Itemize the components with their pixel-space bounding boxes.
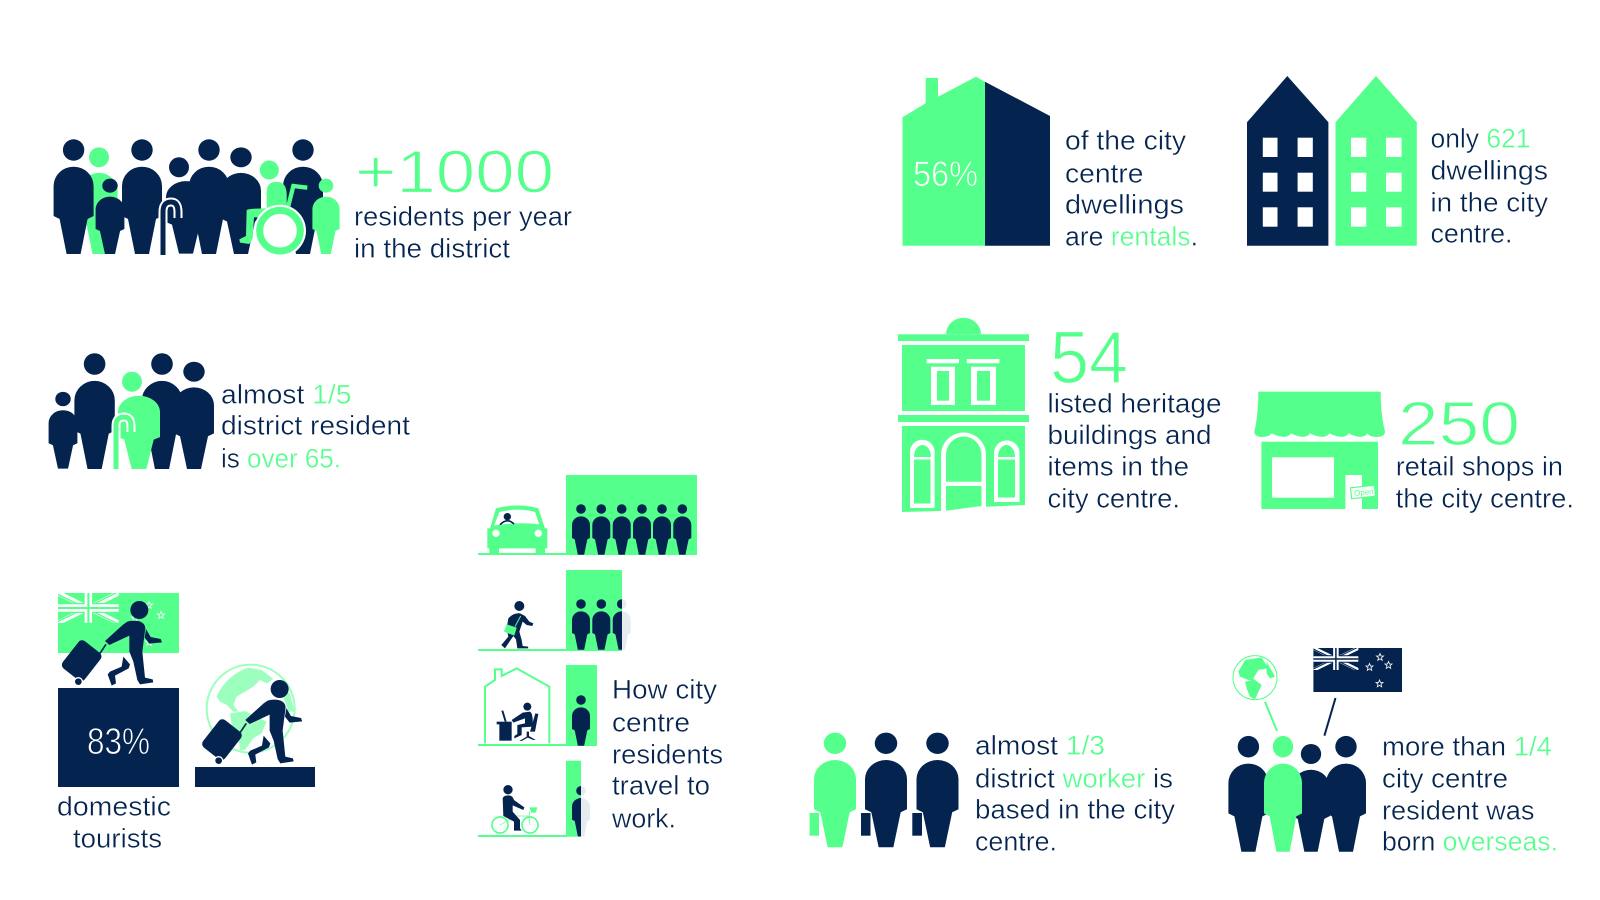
fifth resident (189, 139, 229, 254)
adult far right (174, 362, 214, 469)
people group (1228, 736, 1366, 852)
awning (1254, 392, 1385, 437)
six commuters (572, 504, 691, 555)
dwellings text: only 621 (1430, 124, 1530, 154)
overseas born residents icon (1228, 647, 1402, 852)
walking row (478, 570, 631, 651)
rentals text (1065, 126, 1198, 252)
heritage building icon (898, 318, 1029, 512)
commute caption: centre (612, 708, 690, 738)
walking cane (163, 202, 178, 255)
overseas text: born overseas. (1382, 827, 1558, 857)
overseas text: more than 1/4 (1382, 732, 1552, 762)
rentals text: of the city (1065, 126, 1187, 156)
wheelchair user (239, 160, 307, 257)
+1000 figure: +1000 (355, 139, 554, 206)
commute caption (611, 675, 723, 834)
home office icon (485, 668, 549, 743)
two townhouses icon (1247, 76, 1417, 246)
83% figure: 83% (87, 721, 150, 762)
third resident (122, 139, 162, 254)
pedestrian icon (501, 601, 533, 648)
overseas text: city centre (1382, 763, 1508, 793)
navy bar (58, 688, 179, 787)
over 65 text (221, 379, 411, 473)
adult left (74, 353, 115, 469)
250 figure: 250 (1398, 390, 1520, 459)
over 65 text: district resident (221, 411, 411, 441)
green resident (80, 147, 118, 254)
residents per year text: residents per year (354, 202, 572, 232)
54 figure: 54 (1050, 316, 1128, 399)
dwellings text: centre. (1430, 219, 1512, 249)
domestic tourists label: domestic (57, 792, 171, 822)
group of residents icon (54, 139, 340, 257)
retail text (1396, 452, 1574, 513)
open sign: Open (1354, 487, 1374, 498)
cyclist icon (492, 785, 538, 833)
navy speech line (1324, 698, 1336, 736)
car row (478, 475, 697, 555)
one commuter (572, 695, 590, 746)
globe icon (207, 665, 295, 753)
child (49, 392, 77, 469)
residents per year text (354, 202, 572, 263)
green child (312, 179, 340, 254)
car icon (487, 505, 547, 553)
half commuter (572, 786, 581, 836)
residents per year text: in the district (354, 233, 511, 263)
retail text: the city centre. (1396, 483, 1574, 513)
navy worker (861, 733, 907, 847)
dwellings text: dwellings (1430, 156, 1548, 186)
first resident (54, 139, 94, 254)
heritage text: buildings and (1048, 420, 1212, 450)
commute panel (478, 475, 723, 837)
small globe (1233, 656, 1277, 700)
overseas text (1382, 732, 1558, 857)
dwellings text (1430, 124, 1549, 249)
working from home row (478, 665, 597, 746)
commute caption: residents (612, 740, 723, 770)
green townhouse (1336, 76, 1417, 246)
sixth resident (221, 147, 261, 254)
navy bar (195, 767, 315, 787)
green worker (810, 733, 856, 847)
rentals text: centre (1065, 158, 1144, 188)
heritage text: listed heritage (1048, 388, 1222, 418)
workers text: centre. (975, 827, 1057, 857)
workers text: based in the city (975, 795, 1176, 825)
workers text: district worker is (975, 763, 1173, 793)
navy worker (912, 733, 958, 847)
domestic tourists panel (57, 592, 179, 854)
workers text (975, 731, 1176, 857)
faded commuter (572, 786, 590, 836)
green NZ flag (58, 592, 179, 653)
three commuters (572, 599, 622, 650)
rentals text: dwellings (1065, 190, 1184, 220)
international tourists panel (195, 665, 315, 787)
green speech line (1265, 702, 1277, 731)
dwellings text: in the city (1430, 188, 1549, 218)
seventh resident (283, 139, 323, 254)
green elderly resident (118, 372, 160, 469)
child resident (96, 179, 124, 254)
adult right (142, 353, 182, 469)
commute caption: How city (612, 675, 718, 705)
commute caption: work. (611, 804, 676, 834)
heritage text: items in the (1048, 452, 1189, 482)
green cane (116, 417, 131, 469)
traveller icon (60, 601, 162, 686)
navy townhouse (1247, 76, 1328, 246)
cycling row (478, 761, 590, 837)
commute caption: travel to (612, 771, 710, 801)
workers icon (810, 733, 958, 847)
domestic tourists label (57, 792, 171, 854)
56% figure: 56% (913, 155, 978, 194)
elderly resident (166, 157, 206, 254)
over 65 residents icon (49, 353, 214, 469)
over 65 text: is over 65. (221, 443, 341, 473)
heritage text: city centre. (1048, 483, 1180, 513)
traveller icon (200, 680, 302, 765)
domestic tourists label: tourists (73, 824, 162, 854)
shop front (1261, 442, 1378, 509)
over 65 text: almost 1/5 (221, 379, 352, 409)
heritage text (1048, 388, 1222, 513)
workers text: almost 1/3 (975, 731, 1105, 761)
retail shop icon (1254, 392, 1385, 509)
rentals text: are rentals. (1065, 222, 1198, 252)
overseas text: resident was (1382, 796, 1534, 826)
rentals house icon (902, 77, 1050, 246)
navy NZ flag (1313, 647, 1402, 692)
retail text: retail shops in (1396, 452, 1563, 482)
faded commuter (613, 599, 631, 650)
